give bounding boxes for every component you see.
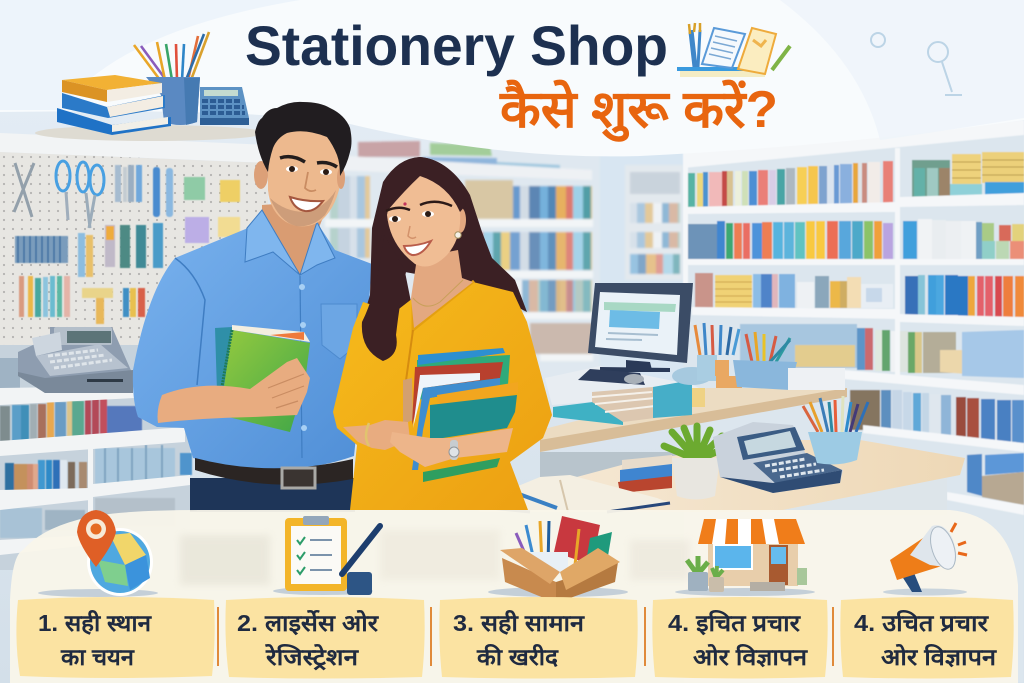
pencil cup bbox=[134, 32, 209, 125]
woman bbox=[333, 157, 552, 510]
step 5 label: 4. उचित प्रचार bbox=[854, 609, 990, 636]
monitor bbox=[588, 283, 693, 372]
man hair bbox=[255, 102, 352, 176]
background right monitor and desk bbox=[472, 283, 965, 515]
books row 5 bbox=[850, 390, 1024, 444]
man collar bbox=[245, 210, 335, 275]
step 3 bbox=[439, 516, 638, 678]
pen tray bbox=[695, 323, 845, 390]
card 5 bbox=[840, 597, 1014, 678]
card 1 bbox=[16, 597, 215, 678]
icon: megaphone bbox=[883, 523, 967, 596]
man belt bbox=[195, 458, 353, 488]
step 4 label: 4. इचित प्रचार bbox=[668, 609, 802, 636]
woman book stack bbox=[403, 348, 518, 482]
pens and cards on pegboard bbox=[15, 165, 240, 324]
step 5 label: ओर विज्ञापन bbox=[881, 643, 997, 670]
step 2 label: 2. लाइर्सेस ओर bbox=[237, 609, 380, 636]
cash register front bbox=[713, 422, 843, 493]
icon: clipboard bbox=[273, 516, 380, 595]
right bookshelves bbox=[683, 120, 1024, 683]
title icon: books and pencils bbox=[677, 23, 790, 77]
step 3 label: 3. सही सामान bbox=[453, 609, 585, 636]
desk pencil cup bbox=[803, 396, 868, 464]
potted plant bbox=[664, 426, 726, 500]
icon: map pin bbox=[38, 510, 158, 597]
step 1 bbox=[16, 510, 215, 678]
man trousers bbox=[190, 478, 355, 512]
shelf boards bbox=[683, 120, 1024, 515]
step 1 label: 1. सही स्थान bbox=[38, 609, 152, 636]
step 4 bbox=[652, 519, 828, 678]
card 2 bbox=[225, 597, 425, 678]
man shirt bbox=[133, 224, 372, 470]
round tape bbox=[672, 367, 712, 385]
card 4 bbox=[652, 597, 828, 678]
title english: Stationery Shop bbox=[245, 14, 668, 77]
step 1 label bbox=[38, 609, 152, 670]
back desk bbox=[540, 388, 847, 450]
man head bbox=[254, 102, 352, 227]
open book bbox=[472, 475, 670, 512]
monitor platform bbox=[545, 366, 707, 405]
books row 6 bbox=[967, 453, 1024, 505]
icon: box of supplies bbox=[488, 516, 628, 603]
woman dress bbox=[333, 282, 552, 510]
left shelf unit bbox=[0, 345, 190, 570]
books row 2 bbox=[688, 221, 893, 260]
keyboard bbox=[578, 369, 645, 385]
books row 1 bbox=[688, 161, 893, 209]
woman hair front lock bbox=[362, 235, 406, 361]
top sky area bbox=[0, 0, 1024, 156]
woman arms and hands bbox=[343, 420, 410, 450]
step 4 label: ओर विज्ञापन bbox=[693, 643, 808, 670]
desk cash register left bbox=[18, 327, 133, 393]
left wall with pegboard bbox=[0, 133, 300, 570]
woman head bbox=[376, 157, 466, 267]
step 2 bbox=[225, 516, 425, 678]
blue notebook behind bbox=[215, 327, 232, 392]
faint icons top right bbox=[871, 33, 962, 95]
step 5 bbox=[840, 523, 1014, 678]
scissors on pegboard bbox=[14, 161, 104, 228]
man neck bbox=[262, 200, 330, 276]
woman neck bbox=[411, 250, 473, 328]
stacked books on desk bbox=[553, 380, 705, 425]
books row 4 bbox=[740, 324, 1024, 378]
card 3 bbox=[439, 597, 638, 678]
woman hair back bbox=[360, 157, 527, 361]
bottom panel bbox=[10, 510, 1018, 683]
step 2 label: रेजिस्ट्रेशन bbox=[264, 643, 359, 671]
man bbox=[133, 102, 372, 512]
green notebook bbox=[220, 325, 310, 432]
woman hair front bbox=[376, 157, 466, 255]
man arm and hand bbox=[158, 358, 310, 423]
right column books bbox=[903, 152, 1024, 317]
stack of books bbox=[57, 75, 171, 135]
step 5 label bbox=[854, 609, 997, 670]
books row 3 bbox=[695, 273, 893, 308]
icon: store bbox=[675, 519, 815, 596]
step 3 label: की खरीद bbox=[476, 643, 559, 670]
title hindi: कैसे शुरू करें? bbox=[499, 79, 778, 142]
step 2 label bbox=[237, 609, 380, 671]
calculator bbox=[200, 87, 249, 125]
step 4 label bbox=[668, 609, 808, 670]
step 3 label bbox=[453, 609, 585, 670]
top left desk items bbox=[35, 32, 265, 141]
far centre shelves bbox=[320, 141, 690, 390]
step 1 label: का चयन bbox=[60, 644, 135, 670]
front counter bbox=[573, 440, 965, 512]
small book stack bbox=[618, 455, 672, 493]
